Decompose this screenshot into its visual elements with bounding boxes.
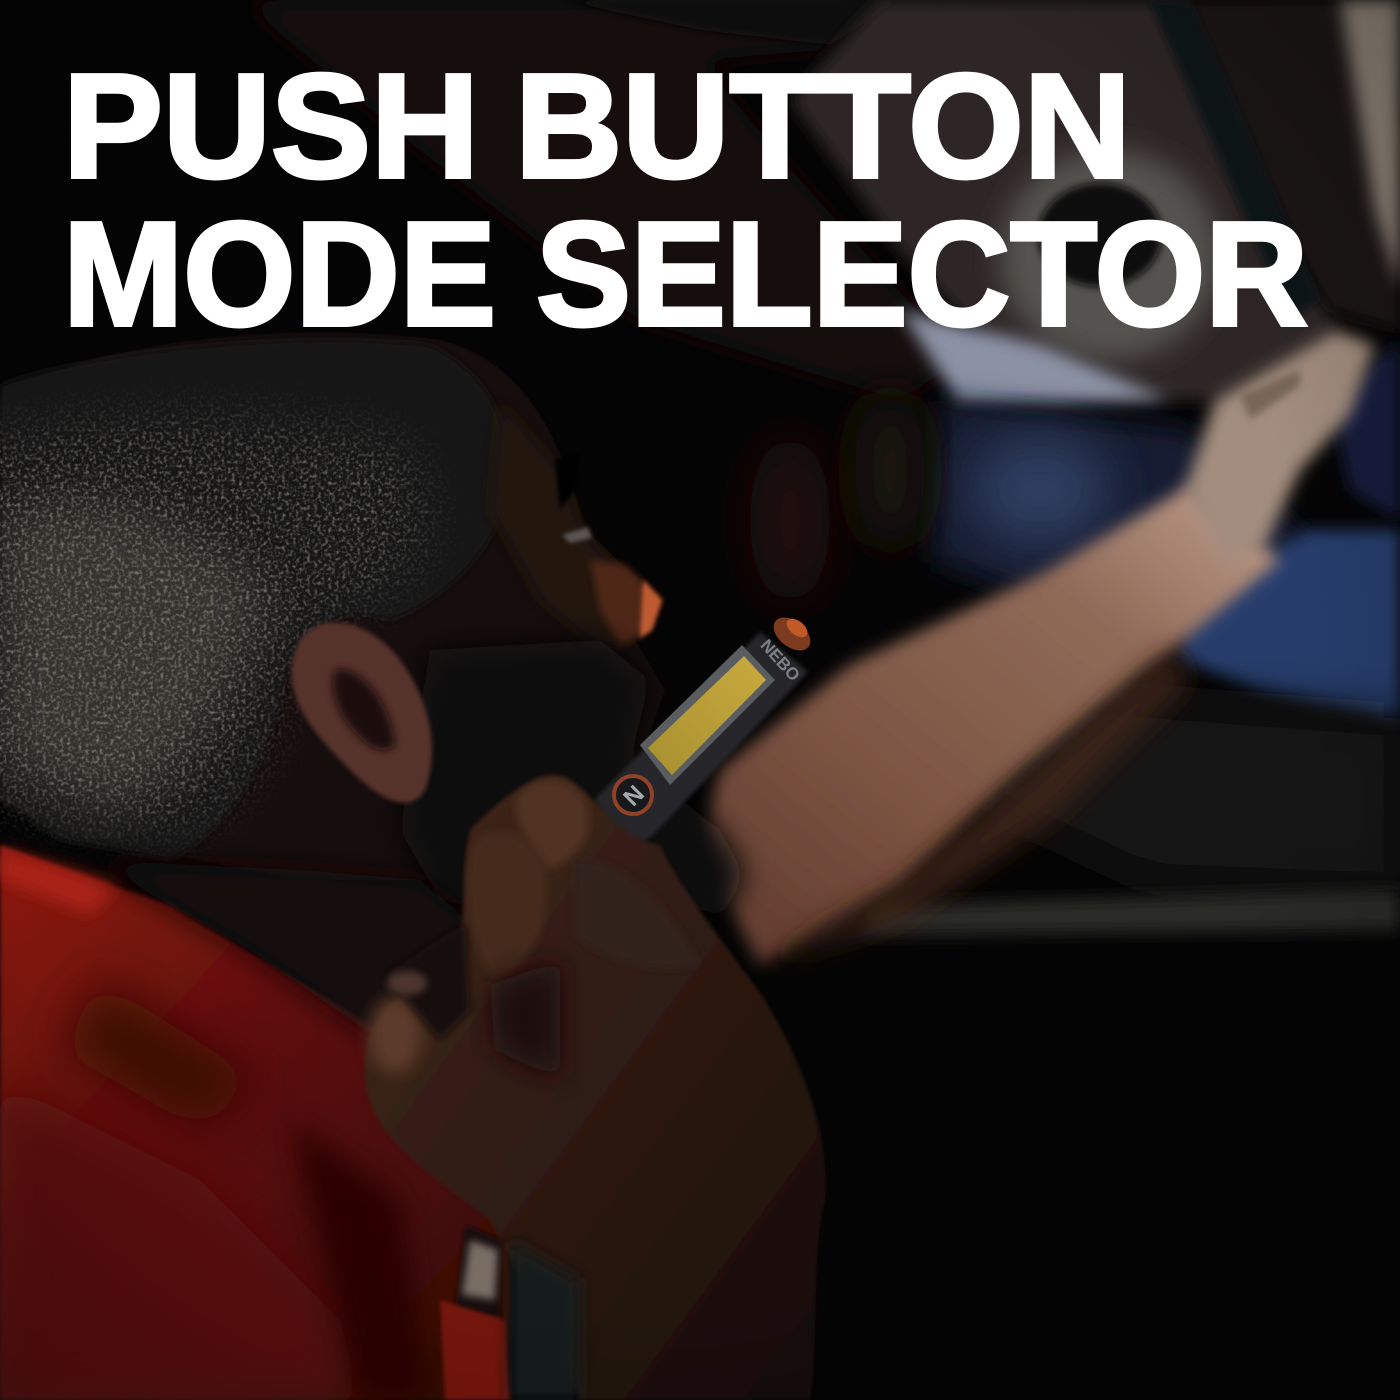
orange push button <box>767 611 817 657</box>
forearm reaching up to the right <box>700 330 1375 965</box>
title: BUTTON <box>515 44 1131 209</box>
brand wordmark: NEBO <box>757 636 804 685</box>
man's head and hair <box>0 332 745 920</box>
neck <box>90 860 480 1040</box>
hand holding the light <box>364 775 826 1400</box>
red work shirt <box>0 845 510 1400</box>
shirt logo patch <box>440 1225 510 1400</box>
N badge: N <box>618 780 650 812</box>
ear <box>292 623 432 803</box>
N badge <box>614 776 652 814</box>
title <box>63 44 1308 357</box>
title: SELECTOR <box>536 192 1308 357</box>
yellow lens <box>648 656 766 775</box>
title: MODE <box>63 192 496 357</box>
dark sleeve edge beside hand <box>510 1240 580 1400</box>
title: PUSH <box>63 44 479 209</box>
flashlight with push button and yellow COB lens <box>594 611 817 850</box>
